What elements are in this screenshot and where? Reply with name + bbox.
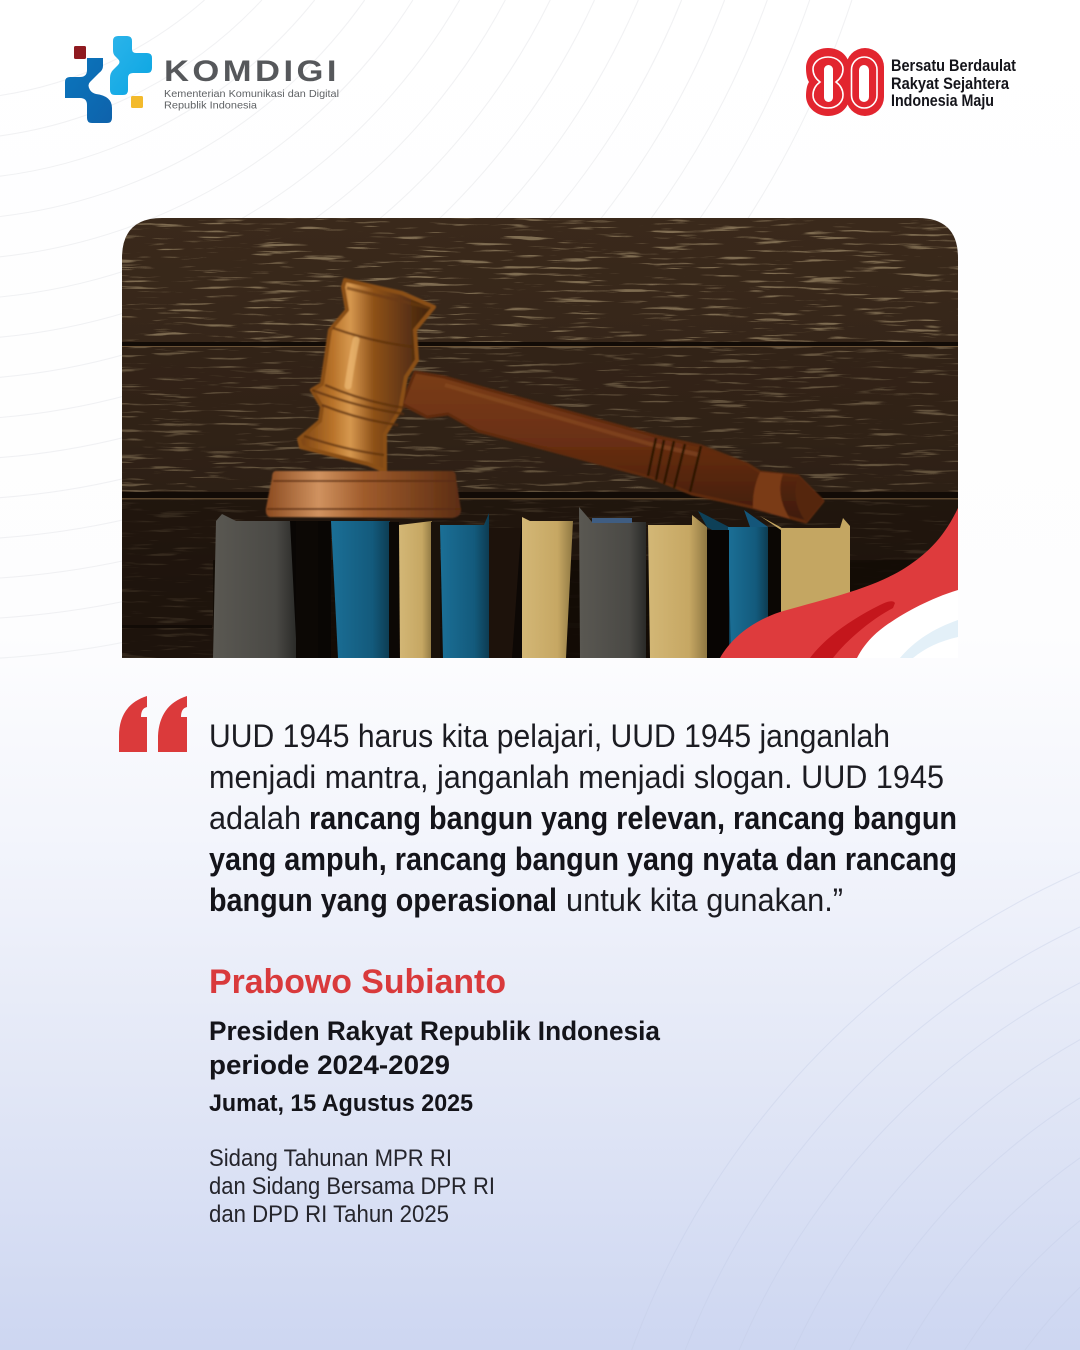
quote text: rancang bangun yang relevan, rancang bangun bbox=[309, 800, 957, 836]
speaker title: periode 2024-2029 bbox=[209, 1050, 450, 1080]
logo: HUT RI 80 bbox=[806, 48, 1016, 116]
icon: quotation mark bbox=[119, 696, 187, 752]
photo: gavel on law books bbox=[122, 218, 958, 658]
book: grey bbox=[579, 507, 646, 658]
gavel handle bbox=[402, 372, 823, 522]
ministry name: Kementerian Komunikasi dan Digital bbox=[164, 88, 339, 100]
book: grey bbox=[213, 514, 297, 658]
quote text bbox=[209, 718, 957, 918]
gavel bbox=[266, 280, 823, 522]
book: tan bbox=[399, 521, 432, 658]
quote text: UUD 1945 harus kita pelajari, UUD 1945 janganlah bbox=[209, 718, 890, 754]
quote text: menjadi mantra, janganlah menjadi slogan. UUD 1945 bbox=[209, 759, 944, 795]
icon: number 80 bbox=[806, 48, 884, 116]
tagline: Indonesia Maju bbox=[891, 92, 994, 110]
book: tan bbox=[768, 527, 782, 616]
event description: dan Sidang Bersama DPR RI bbox=[209, 1173, 495, 1200]
logo: Komdigi bbox=[65, 36, 340, 123]
book: tan bbox=[648, 515, 707, 658]
icon: Komdigi mark bbox=[65, 36, 152, 123]
tagline: Bersatu Berdaulat bbox=[891, 57, 1016, 75]
books bbox=[213, 507, 958, 658]
sound block bbox=[266, 471, 461, 518]
tagline bbox=[891, 57, 1016, 110]
quote text: untuk kita gunakan.” bbox=[566, 882, 843, 918]
book: blue bbox=[698, 511, 731, 645]
book: blue bbox=[440, 513, 489, 658]
logo: Komdigi: Republik Indonesia bbox=[164, 100, 257, 112]
event description: dan DPD RI Tahun 2025 bbox=[209, 1201, 449, 1228]
wood wall bbox=[122, 218, 958, 658]
quote text: yang ampuh, rancang bangun yang nyata dan rancang bbox=[209, 841, 957, 877]
quote text: adalah bbox=[209, 800, 301, 836]
background contour lines, top left bbox=[0, 0, 852, 658]
background contour lines, bottom right bbox=[632, 872, 1080, 1350]
book: blue bbox=[331, 521, 390, 658]
date: Jumat, 15 Agustus 2025 bbox=[209, 1090, 473, 1117]
speaker name: Prabowo Subianto bbox=[209, 963, 506, 1001]
speaker title bbox=[209, 1016, 661, 1080]
quote text: bangun yang operasional bbox=[209, 882, 557, 918]
gavel head bbox=[299, 280, 434, 471]
event description bbox=[209, 1145, 495, 1228]
speaker title: Presiden Rakyat Republik Indonesia bbox=[209, 1016, 661, 1046]
tagline: Rakyat Sejahtera bbox=[891, 75, 1010, 93]
red and white flag wave bbox=[720, 508, 958, 658]
book: tan slanted bbox=[522, 517, 573, 658]
event description: Sidang Tahunan MPR RI bbox=[209, 1145, 452, 1172]
wordmark: KOMDIGI bbox=[164, 55, 340, 88]
